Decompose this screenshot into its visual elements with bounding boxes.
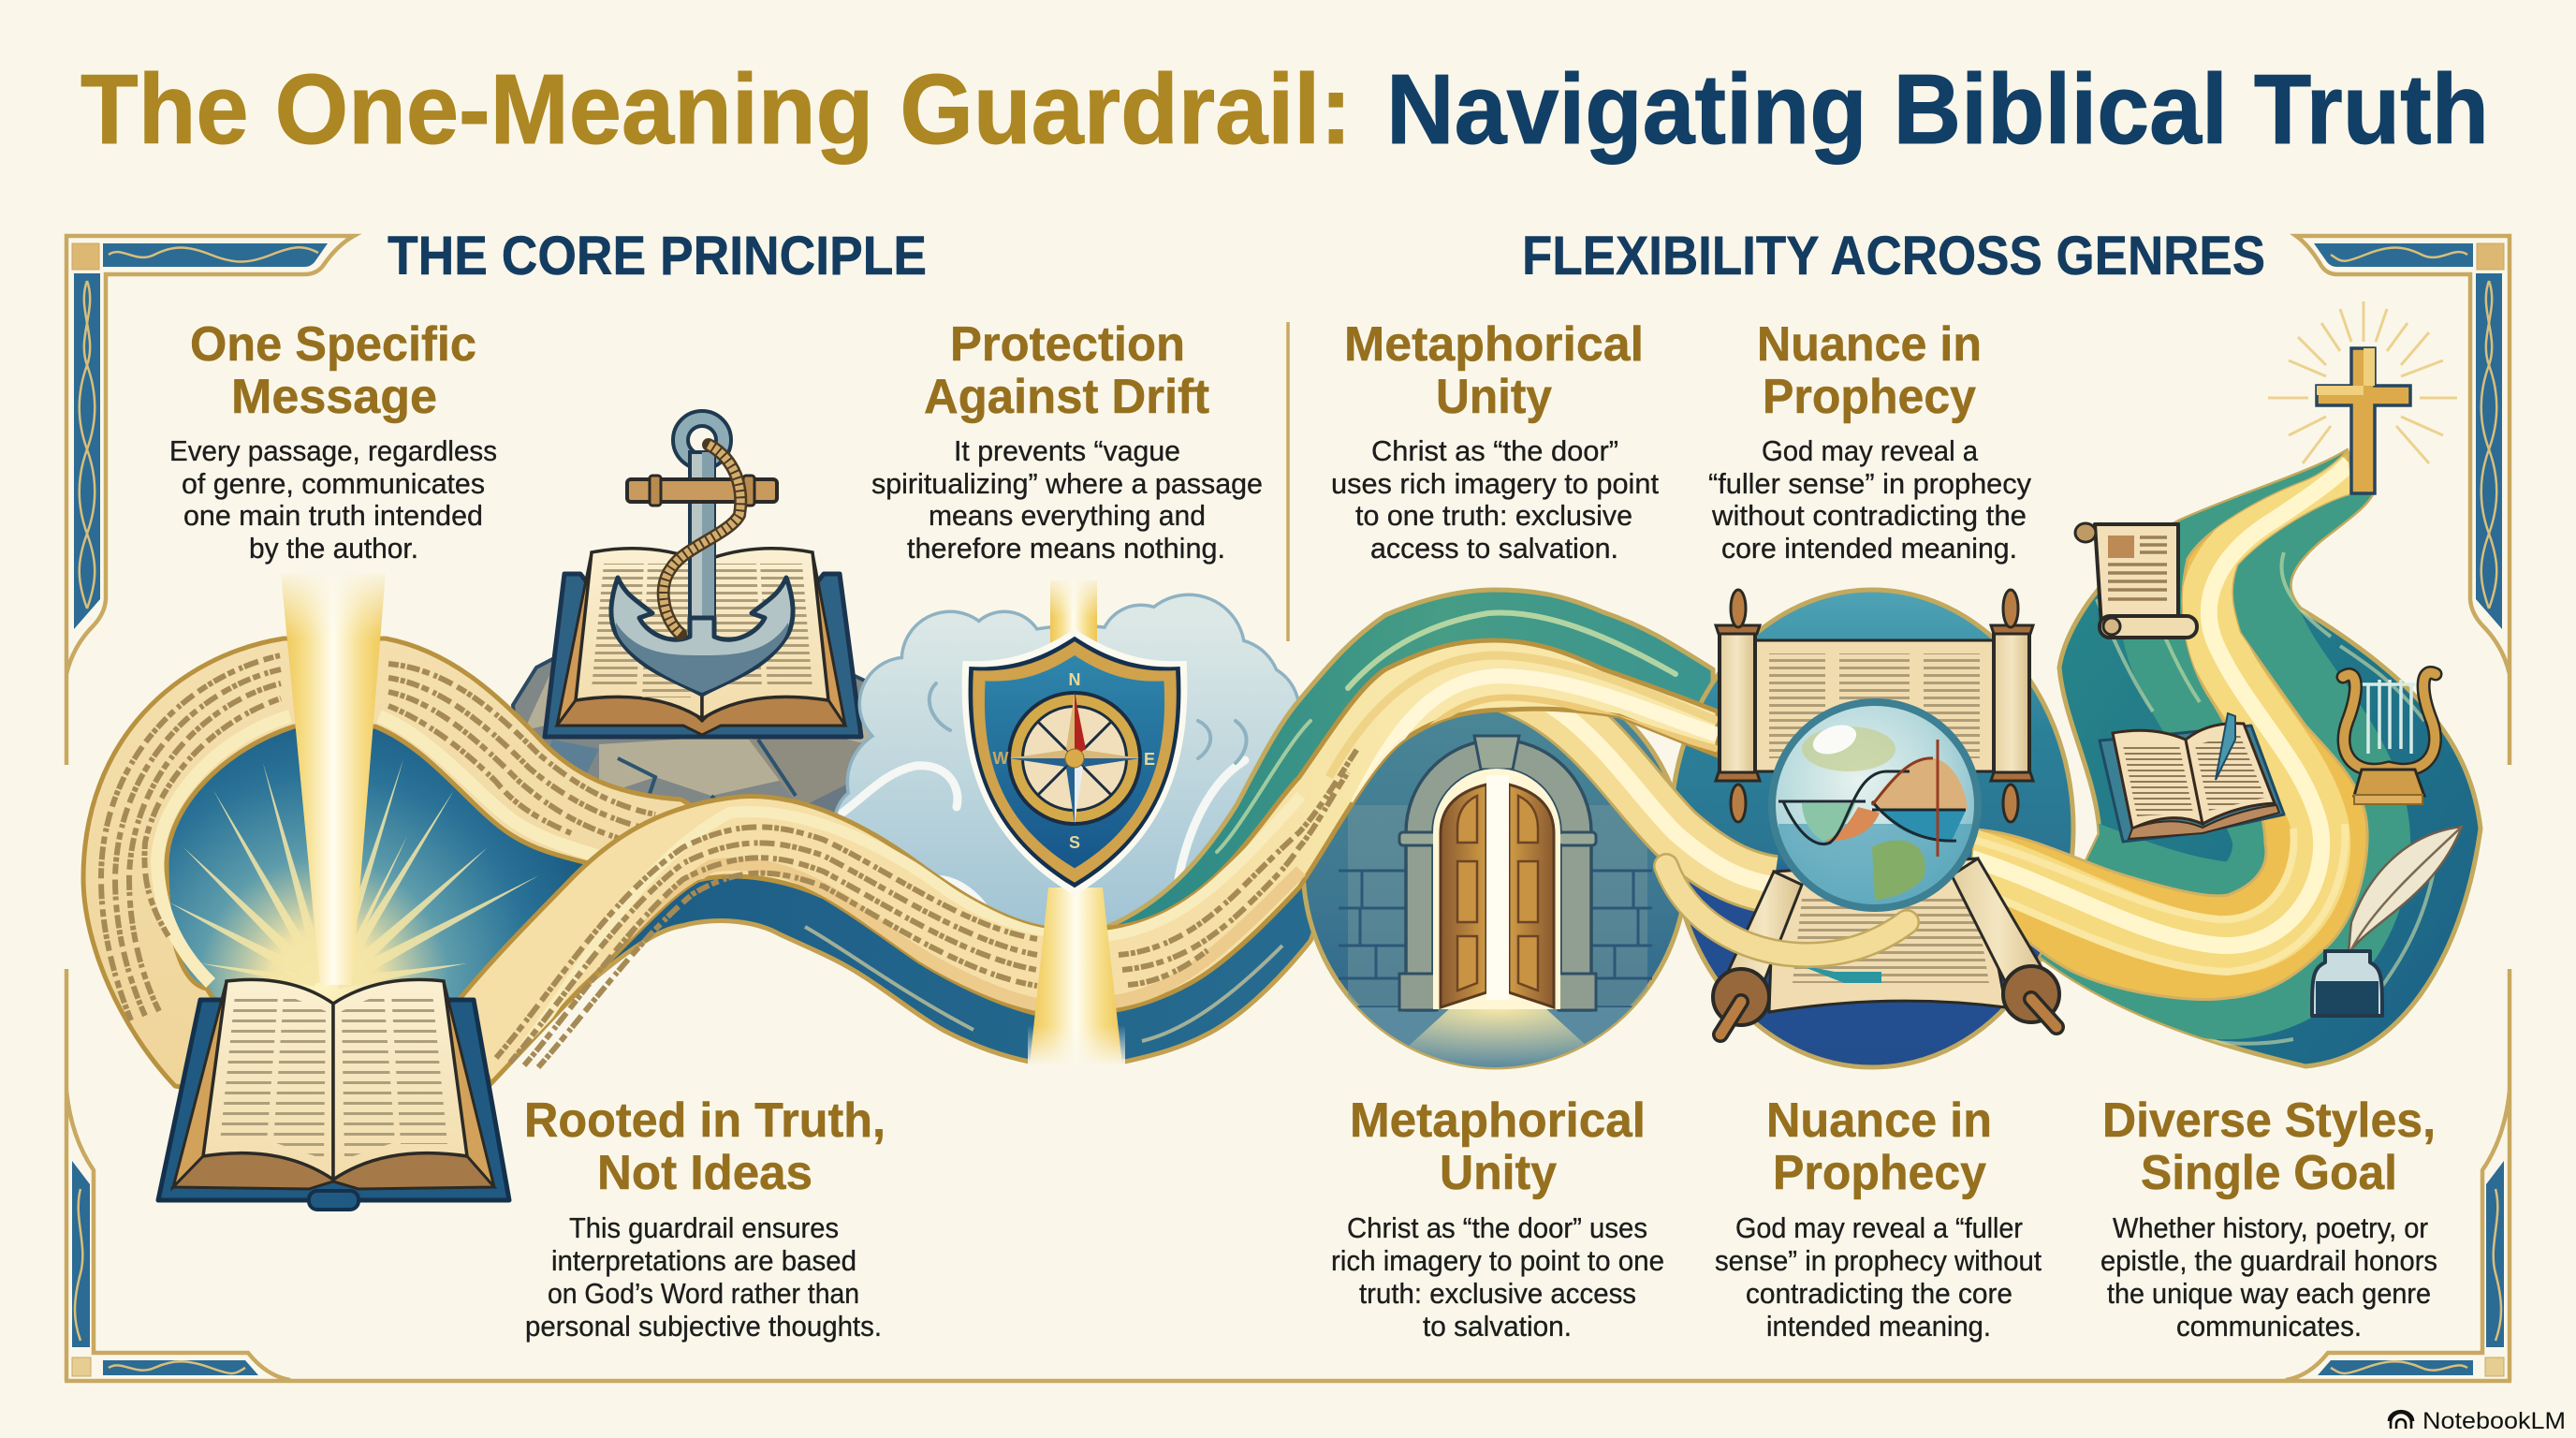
text block: Nuance in Prophecy (bottom) [1715, 1093, 2042, 1343]
text block: Nuance in Prophecy (top) [1708, 317, 2031, 565]
door opening and leaves [1433, 769, 1560, 1009]
sun rays [169, 759, 539, 989]
text block: Diverse Styles, Single Goal: Diverse Styles, [2102, 1093, 2436, 1148]
title: Navigating Biblical Truth [1386, 54, 2489, 165]
text block: Rooted in Truth: on God’s Word rather than [548, 1277, 859, 1310]
compass letters: S [1069, 833, 1080, 852]
text block: One Specific Message: by the author. [249, 532, 418, 565]
anchor [611, 418, 793, 695]
ribbon text rows [101, 655, 655, 1020]
ribbon: teal upper band [1107, 590, 1713, 946]
text block: Nuance in Prophecy (top): God may reveal a [1762, 434, 1979, 467]
text block: Protection Against Drift [871, 317, 1263, 565]
text block: Nuance in Prophecy (top): Prophecy [1763, 370, 1976, 424]
compass letters [992, 670, 1155, 852]
compass letters: N [1069, 670, 1080, 689]
frame: bottom-left corner [66, 969, 290, 1381]
text block: Nuance in Prophecy (bottom): Prophecy [1773, 1146, 1986, 1200]
text block: Diverse Styles, Single Goal: Single Goal [2141, 1146, 2397, 1200]
text block: Rooted in Truth: Not Ideas [597, 1146, 812, 1200]
icon: open book with nib [2100, 713, 2284, 842]
ornamental frame [65, 236, 2511, 1381]
text block: Protection Against Drift: means everything and [929, 499, 1206, 532]
illustration: clouds behind shield [836, 596, 1297, 946]
frame: top-right corner [2296, 236, 2510, 765]
text block: Metaphorical Unity (bottom): rich imagery to point to one [1331, 1244, 1664, 1277]
book pages [557, 549, 845, 735]
compass face [1007, 691, 1142, 826]
bottom scroll [1713, 858, 2059, 1034]
icon: cross with rays [2268, 301, 2457, 493]
text block: Diverse Styles, Single Goal [2100, 1093, 2437, 1343]
illustration: big open book with light beam [158, 569, 509, 1210]
text block: Metaphorical Unity (bottom): truth: exclusive access [1359, 1277, 1636, 1310]
ribbon: blue underlayer [524, 833, 1348, 1063]
compass letters: W [992, 749, 1009, 768]
text block: Metaphorical Unity (bottom): Christ as “the door” uses [1347, 1211, 1647, 1244]
text block: Nuance in Prophecy (bottom): intended meaning. [1766, 1310, 1991, 1343]
text block: Diverse Styles, Single Goal: Whether history, poetry, or [2113, 1211, 2428, 1244]
text block: Nuance in Prophecy (bottom): God may reveal a “fuller [1735, 1211, 2023, 1244]
icon: lyre [2343, 673, 2436, 804]
text block: Metaphorical Unity (bottom) [1331, 1093, 1664, 1343]
text block: Nuance in Prophecy (bottom): Nuance in [1766, 1093, 1992, 1148]
text block: Rooted in Truth: This guardrail ensures [569, 1211, 839, 1244]
text block: Metaphorical Unity (top): to one truth: exclusive [1355, 499, 1632, 532]
golden river [1966, 451, 2367, 1000]
text block: Nuance in Prophecy (top): without contradicting the [1711, 499, 2027, 532]
text block: Protection Against Drift: It prevents “vague [954, 434, 1180, 467]
text block: Nuance in Prophecy (top): Nuance in [1757, 317, 1982, 372]
text block: Metaphorical Unity (top) [1331, 317, 1659, 565]
text block: One Specific Message: of genre, communicates [182, 467, 485, 500]
text block: Metaphorical Unity (bottom): Unity [1440, 1146, 1557, 1200]
stone arch and pillars [1399, 736, 1596, 1010]
illustration: anchor on open book on rock [513, 418, 906, 847]
text block: Diverse Styles, Single Goal: the unique way each genre [2107, 1277, 2431, 1310]
text block: One Specific Message: Every passage, regardless [169, 434, 497, 467]
gold branch flowing toward lower scroll [1460, 674, 1774, 885]
text block: Protection Against Drift: therefore means nothing. [907, 532, 1225, 565]
text block: Rooted in Truth [524, 1093, 886, 1343]
text block: Metaphorical Unity (top): Metaphorical [1344, 317, 1644, 372]
illustration: scroll with globe [1666, 590, 2059, 1034]
text block: Rooted in Truth: Rooted in Truth, [524, 1093, 886, 1148]
page blocks [173, 979, 494, 1189]
section headings: THE CORE PRINCIPLE [388, 226, 927, 286]
book cover [158, 1000, 509, 1200]
stone wall [1339, 805, 1652, 1067]
text block: Protection Against Drift: Protection [950, 317, 1185, 372]
text block: Nuance in Prophecy (bottom): sense” in prophecy without [1715, 1244, 2042, 1277]
frame: bottom rule [65, 1379, 2511, 1383]
text block: One Specific Message: One Specific [190, 317, 476, 372]
section headings [388, 226, 2265, 286]
text block: Diverse Styles, Single Goal: communicates. [2176, 1310, 2362, 1343]
text block: Nuance in Prophecy (top): “fuller sense” in prophecy [1708, 467, 2031, 500]
compass letters: E [1144, 750, 1155, 769]
frame: bottom-right corner [2286, 969, 2510, 1381]
beam above shield [1046, 576, 1101, 646]
title [80, 54, 2489, 165]
icon: quill and ink bottle [2312, 827, 2462, 1016]
text block: Rooted in Truth: personal subjective thoughts. [525, 1310, 882, 1343]
illustration: compass shield [962, 629, 1187, 896]
top scroll [1716, 590, 2033, 822]
ribbon text rows [496, 749, 1357, 1067]
text block: Rooted in Truth: interpretations are based [551, 1244, 856, 1277]
text block: Nuance in Prophecy (bottom): contradicting the core [1746, 1277, 2012, 1310]
column divider [1286, 322, 1290, 641]
book cover [545, 574, 861, 737]
text block: Metaphorical Unity (bottom): to salvation. [1423, 1310, 1572, 1343]
ribbon: main scroll wave flowing into gold [460, 640, 1718, 1084]
icon: parchment scroll [2075, 523, 2197, 638]
rock [513, 658, 906, 847]
gold curl over scroll [1666, 866, 1907, 955]
frame: top-left corner [66, 236, 354, 765]
text block: Protection Against Drift: spiritualizing” where a passage [871, 467, 1263, 500]
text block: One Specific Message [169, 317, 497, 565]
section headings: FLEXIBILITY ACROSS GENRES [1522, 226, 2265, 286]
text block: Protection Against Drift: Against Drift [924, 370, 1209, 424]
text block: Nuance in Prophecy (top): core intended meaning. [1721, 532, 2017, 565]
vertical beam of light [271, 569, 395, 985]
text block: Diverse Styles, Single Goal: epistle, the guardrail honors [2100, 1244, 2437, 1277]
illustration: blue sunburst disk [167, 726, 599, 1030]
illustration: scroll circle background [1671, 590, 2073, 1067]
illustration: stone door circle [1301, 712, 1683, 1069]
text block: One Specific Message: one main truth intended [183, 499, 483, 532]
text block: Metaphorical Unity (top): access to salvation. [1370, 532, 1618, 565]
text block: One Specific Message: Message [231, 370, 437, 424]
NotebookLM watermark: NotebookLM [2422, 1408, 2566, 1434]
text block: Metaphorical Unity (top): Unity [1436, 370, 1552, 424]
ribbon: first scroll arc with text rows [83, 638, 749, 1105]
beam below shield [1028, 888, 1125, 1066]
text block: Metaphorical Unity (top): uses rich imagery to point [1331, 467, 1659, 500]
title: The One-Meaning Guardrail: [80, 54, 1352, 165]
illustration: right teal river [1966, 451, 2481, 1066]
text block: Metaphorical Unity (top): Christ as “the door” [1371, 434, 1618, 467]
text block: Metaphorical Unity (bottom): Metaphorical [1350, 1093, 1646, 1148]
glass globe [1772, 702, 1978, 908]
